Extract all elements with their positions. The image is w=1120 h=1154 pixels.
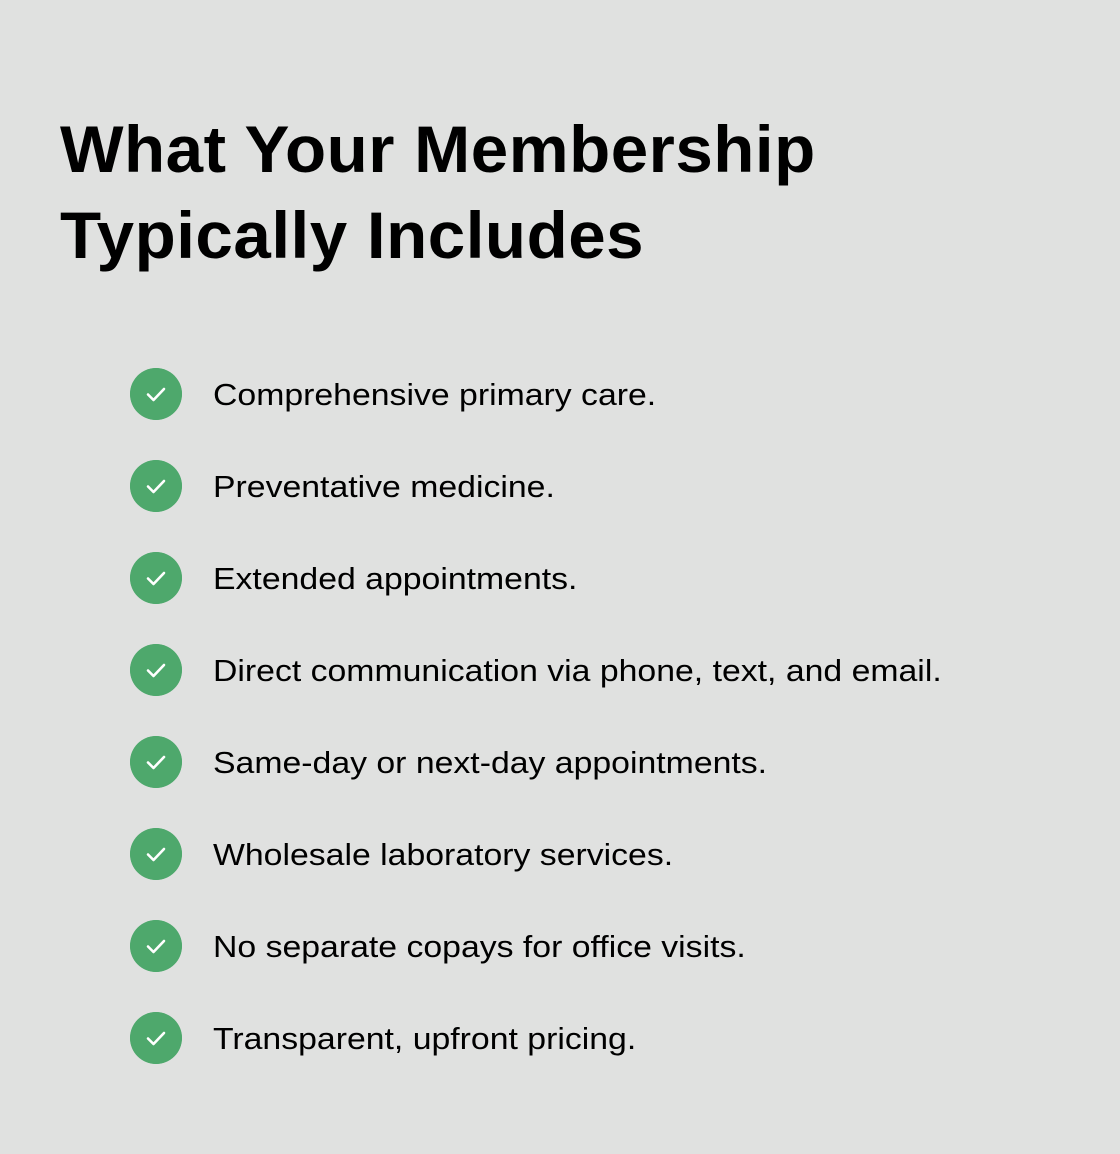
list item 3: Extended appointments. <box>213 561 577 596</box>
list item 7 <box>130 920 746 972</box>
list item 5: Same-day or next-day appointments. <box>213 745 767 780</box>
title: Typically Includes <box>60 198 644 272</box>
title: What Your Membership <box>60 112 816 186</box>
list item 3 <box>130 552 577 604</box>
list item 7: No separate copays for office visits. <box>213 929 746 964</box>
list item 8: Transparent, upfront pricing. <box>213 1021 636 1056</box>
list item 6: Wholesale laboratory services. <box>213 837 673 872</box>
list item 8 <box>130 1012 636 1064</box>
list item 2: Preventative medicine. <box>213 469 555 504</box>
title <box>60 112 816 272</box>
list item 2 <box>130 460 555 512</box>
list item 4 <box>130 644 942 696</box>
list item 5 <box>130 736 767 788</box>
list item 4: Direct communication via phone, text, and email. <box>213 653 942 688</box>
list item 6 <box>130 828 673 880</box>
list item 1 <box>130 368 656 420</box>
list item 1: Comprehensive primary care. <box>213 377 656 412</box>
